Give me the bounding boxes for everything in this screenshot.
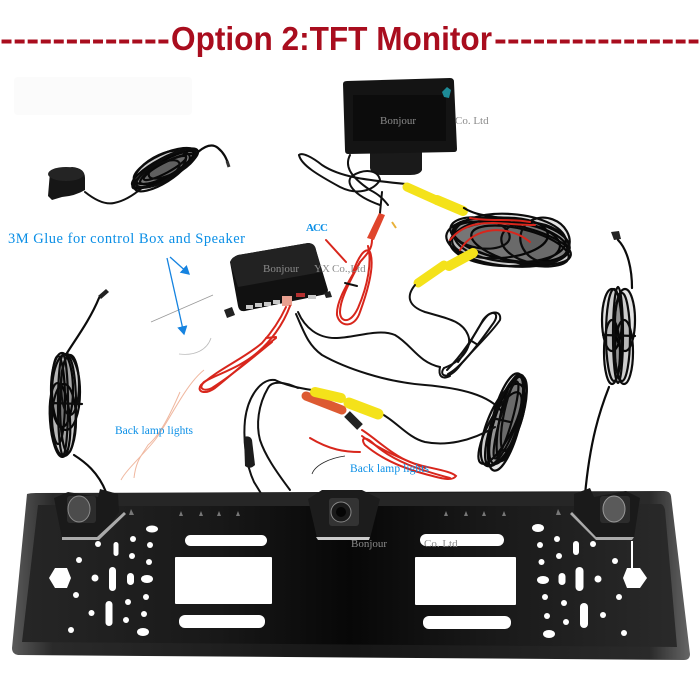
- plate back panel: [22, 504, 677, 647]
- large black and red cable coil: [444, 208, 576, 275]
- plate watermark: Bonjour: [351, 538, 387, 550]
- left sensor cable coil: [47, 289, 109, 492]
- plate watermark: Co. Ltd: [424, 538, 458, 550]
- TFT monitor: [343, 78, 489, 175]
- arrows to glue pads: [151, 257, 213, 354]
- text: ACC label: ACC: [306, 222, 328, 234]
- camera connectors and cable: [244, 380, 495, 495]
- plate mounting holes left: [49, 526, 158, 636]
- back lamp red wire harness: [121, 306, 290, 480]
- left parking sensor: [54, 489, 126, 540]
- plate outer rim: [12, 491, 690, 660]
- monitor wiring with yellow connectors: [299, 154, 463, 240]
- control box: Bonjour: [263, 263, 299, 275]
- plate watermark: [351, 538, 458, 550]
- title banner: -------------: [0, 20, 170, 57]
- license plate frame: [12, 488, 690, 660]
- ACC red wire coil: [326, 240, 372, 324]
- right sensor cable coil: [585, 231, 635, 495]
- second yellow connector and cable: [410, 253, 500, 376]
- control box: YX: [314, 263, 330, 275]
- control box: [224, 243, 366, 318]
- faint erased smudge: [14, 77, 192, 115]
- TFT monitor: Co. Ltd: [455, 115, 489, 127]
- small clip marks: [129, 509, 561, 516]
- rear view camera: [308, 490, 380, 540]
- title banner: [0, 20, 700, 57]
- text: 3M glue label: 3M Glue for control Box and Speaker: [8, 231, 245, 247]
- control box: Co.,Ltd: [332, 263, 366, 275]
- title banner: ----------------: [494, 20, 700, 57]
- plate mounting holes right: [532, 524, 647, 638]
- text: back lamp lights right: Back lamp lights: [350, 463, 430, 475]
- icon: buzzer speaker with cable: [48, 141, 229, 203]
- TFT monitor: Bonjour: [380, 115, 416, 127]
- lower right black cable coil: [471, 370, 535, 474]
- text: back lamp lights left: Back lamp lights: [115, 425, 194, 437]
- title banner: Option 2:TFT Monitor: [171, 20, 492, 57]
- right parking sensor: [570, 488, 640, 540]
- cables from control box: [296, 312, 502, 412]
- plate large openings: [175, 534, 516, 629]
